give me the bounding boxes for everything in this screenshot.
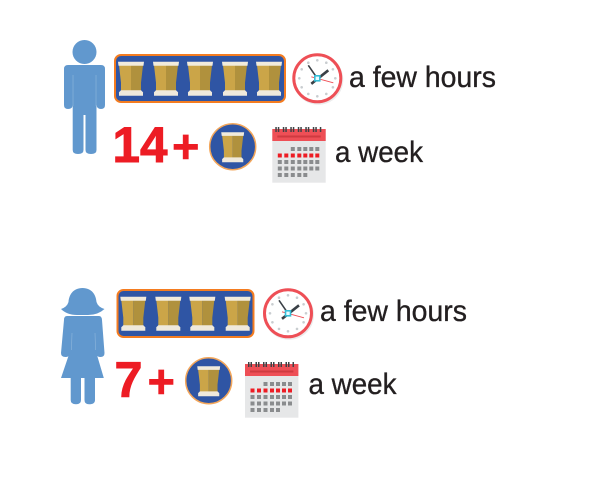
text: a few hours: a few hours [349,61,496,94]
text: a week: a week [308,368,397,401]
icon: single drink [210,124,256,170]
panel: four drinks bar [118,290,254,337]
number: 7: 7 [114,352,142,408]
text: a few hours: a few hours [320,295,467,328]
icon: single drink [186,358,232,404]
number: 14: 14 [112,117,168,173]
panel: women's guideline [61,288,467,418]
icon: man figure [64,40,105,154]
icon: clock [264,290,314,340]
icon: calendar [272,127,326,183]
panel: five drinks bar [115,55,285,102]
icon: calendar [245,362,298,418]
text: a week: a week [335,136,424,169]
symbol: plus: + [172,120,199,172]
icon: woman figure [61,288,104,404]
icon: clock [293,55,343,105]
symbol: plus: + [148,354,175,408]
panel: men's guideline [64,40,496,183]
